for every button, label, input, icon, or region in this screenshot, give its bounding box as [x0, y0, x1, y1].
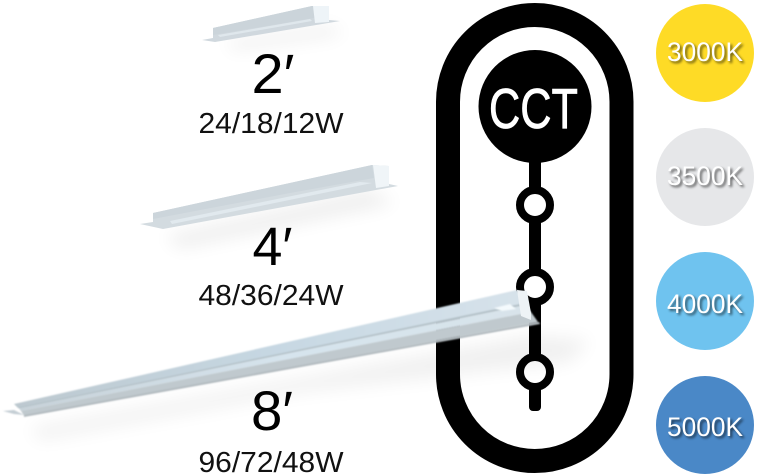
swatch: 5000K: 5000K — [669, 414, 745, 444]
swatch: 3500K — [656, 128, 754, 226]
label: 2 foot: 24/18/12W — [198, 108, 344, 140]
swatch: 5000K: 5000K — [667, 412, 743, 442]
end cap — [517, 290, 531, 320]
upper band — [14, 290, 525, 408]
swatch: 3000K: 3000K — [667, 37, 743, 67]
selector ring 2 — [520, 272, 550, 302]
label: 4 foot: 4′ — [252, 217, 292, 277]
swatch: 3000K: 3000K — [669, 39, 745, 69]
fixture shadow — [30, 335, 590, 440]
highlight — [494, 304, 516, 311]
CCT badge — [478, 50, 592, 163]
vertical stem — [529, 150, 541, 411]
CCT badge: CCT — [489, 77, 578, 141]
fixture: 2 foot — [202, 6, 345, 50]
swatch: 4000K — [656, 252, 754, 350]
selector ring 3 — [520, 357, 550, 387]
lower grey band — [21, 312, 538, 416]
label: 2 foot — [198, 42, 344, 140]
label: 2 foot: 2′ — [252, 42, 294, 105]
swatch: 5000K — [656, 376, 754, 474]
groove line — [18, 303, 526, 408]
left flange — [3, 410, 24, 415]
label: 8 foot: 8′ — [251, 379, 293, 442]
capsule outline — [448, 15, 622, 461]
fixture shadow — [225, 26, 345, 50]
swatch: 3000K — [656, 4, 754, 102]
CCT capsule selector — [448, 15, 622, 461]
lower edge — [24, 322, 540, 417]
lit reflector band — [19, 305, 531, 411]
fixture body bands — [3, 290, 540, 417]
label: 4 foot: 48/36/24W — [198, 280, 344, 312]
swatch: 3500K: 3500K — [667, 161, 743, 191]
swatch: 4000K: 4000K — [667, 289, 743, 319]
swatch: 4000K: 4000K — [669, 291, 745, 321]
fixture shadow — [165, 190, 395, 248]
label: 4 foot — [198, 217, 344, 312]
fixture: 4 foot — [140, 165, 398, 248]
label: 8 foot — [198, 379, 344, 476]
fixture: 8 foot — [3, 290, 590, 440]
selector ring 1 — [520, 190, 550, 220]
swatch: 3500K: 3500K — [669, 163, 745, 193]
